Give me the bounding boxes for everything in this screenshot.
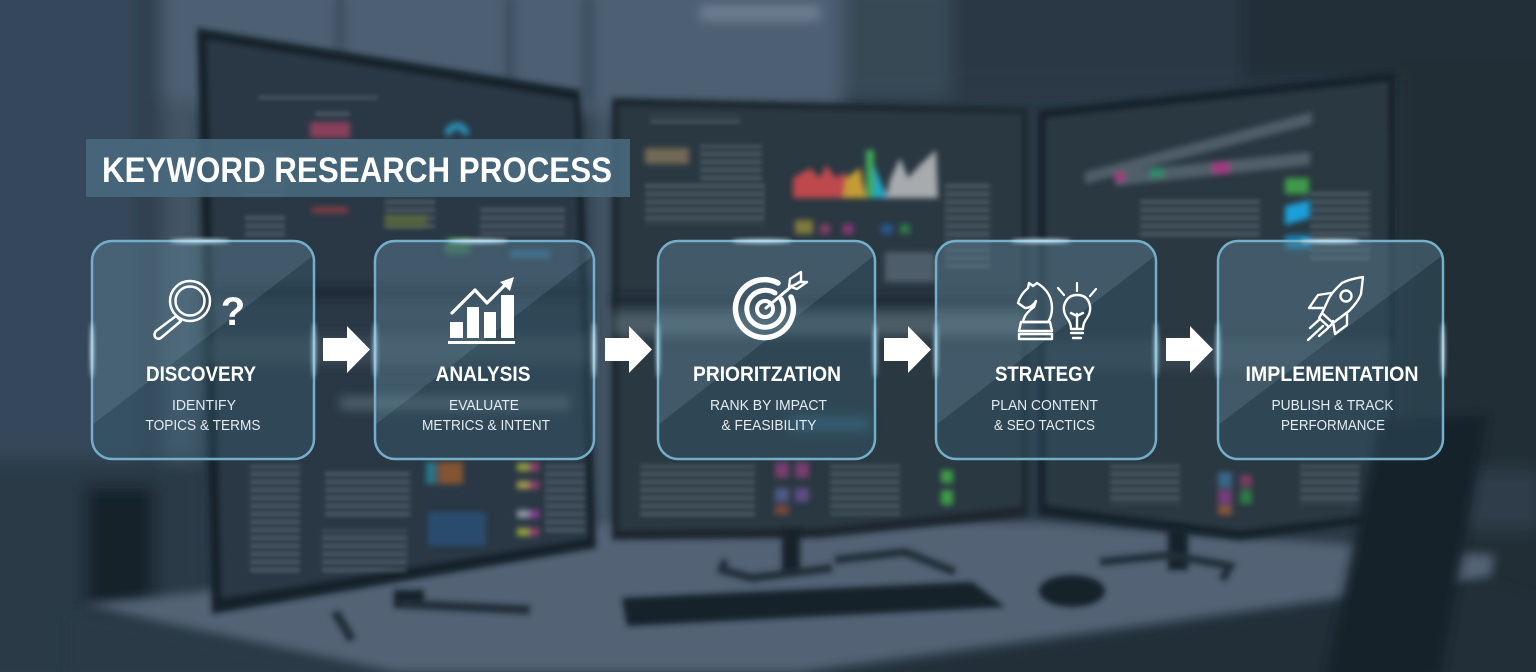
text: analysis description (422, 397, 550, 434)
text: implementation description: PUBLISH & TRACK (1272, 397, 1394, 414)
icon: target with arrow (735, 272, 807, 338)
panel: implementation (1216, 239, 1444, 459)
heading: analysis: ANALYSIS (436, 363, 530, 386)
text: analysis description: EVALUATE (449, 397, 519, 414)
text: implementation description: PERFORMANCE (1281, 417, 1385, 434)
title (86, 139, 630, 197)
arrow 3 (884, 326, 931, 373)
chair (1325, 415, 1488, 672)
panel: analysis (374, 239, 596, 459)
text: strategy description (991, 397, 1098, 434)
text: prioritization description: & FEASIBILITY (722, 417, 816, 434)
icon: rocket (1308, 277, 1363, 340)
title: KEYWORD RESEARCH PROCESS (102, 151, 612, 190)
monitor stands, keyboard, mouse (335, 528, 1230, 640)
heading: discovery: DISCOVERY (146, 363, 256, 386)
panel: discovery (90, 239, 316, 459)
icon: bar chart with rising arrow (448, 277, 515, 344)
text: discovery description (146, 397, 260, 434)
arrow 2 (605, 326, 652, 373)
heading: prioritization: PRIORITZATION (693, 363, 841, 386)
icon: magnifier and question mark: ? (221, 290, 245, 334)
monitors (197, 28, 1395, 614)
heading: implementation: IMPLEMENTATION (1246, 363, 1418, 386)
text: discovery description: IDENTIFY (172, 397, 236, 414)
panel: strategy (934, 239, 1158, 459)
desk (80, 520, 1495, 672)
screen blurred content (310, 112, 1312, 546)
arrow 1 (323, 326, 370, 373)
icon: magnifier and question mark (154, 281, 245, 339)
heading: strategy: STRATEGY (995, 363, 1095, 386)
text: implementation description (1272, 397, 1394, 434)
text: discovery description: TOPICS & TERMS (146, 417, 260, 434)
icon: chess knight and light bulb (1018, 283, 1096, 339)
text: analysis description: METRICS & INTENT (422, 417, 550, 434)
panel: prioritization (656, 239, 876, 459)
text: strategy description: PLAN CONTENT (991, 397, 1098, 414)
text: strategy description: & SEO TACTICS (994, 417, 1095, 434)
screen text lines (240, 92, 1370, 575)
text: prioritization description: RANK BY IMPACT (710, 397, 827, 414)
text: prioritization description (710, 397, 827, 434)
arrow 4 (1166, 326, 1213, 373)
